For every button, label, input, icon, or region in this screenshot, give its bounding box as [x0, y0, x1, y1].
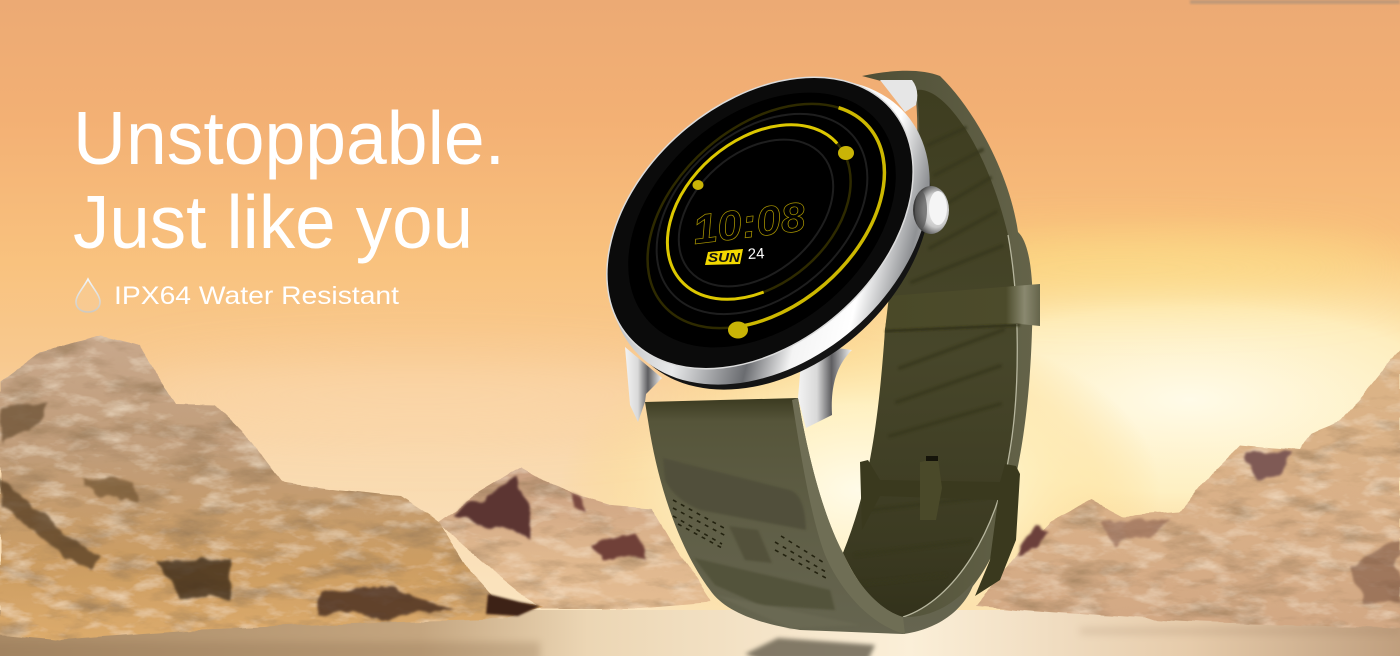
strap ribs	[856, 128, 1003, 584]
watch case underside	[559, 29, 989, 451]
front strap	[645, 398, 975, 634]
date: 24	[747, 245, 765, 263]
yellow ring outer	[604, 59, 928, 373]
watch	[550, 17, 1040, 634]
strap keeper	[885, 284, 1040, 331]
ring dots	[692, 146, 854, 338]
water	[0, 610, 1400, 656]
watch strap shadow reflection	[745, 638, 875, 656]
feature text: IPX64 Water Resistant	[114, 282, 399, 310]
middle mountain	[438, 468, 712, 608]
headline	[73, 96, 505, 264]
strap perforations	[673, 500, 826, 578]
crown	[913, 186, 949, 234]
strap embossed pads	[663, 458, 860, 628]
headline: Unstoppable.	[73, 96, 505, 180]
back strap	[843, 71, 1040, 633]
date	[705, 245, 765, 265]
silver lugs	[625, 80, 917, 428]
yellow ring inner	[633, 89, 885, 335]
buckle	[860, 456, 1020, 596]
yellow ring dim parts	[604, 59, 928, 373]
icon: water drop	[76, 279, 100, 312]
date: SUN	[708, 250, 741, 265]
left mountain	[0, 336, 542, 640]
watch face	[550, 18, 970, 428]
headline: Just like you	[73, 180, 473, 264]
right mountains	[975, 350, 1400, 628]
digital time: 10:08	[690, 193, 808, 253]
faint rings	[618, 73, 906, 355]
watch case	[550, 17, 990, 447]
